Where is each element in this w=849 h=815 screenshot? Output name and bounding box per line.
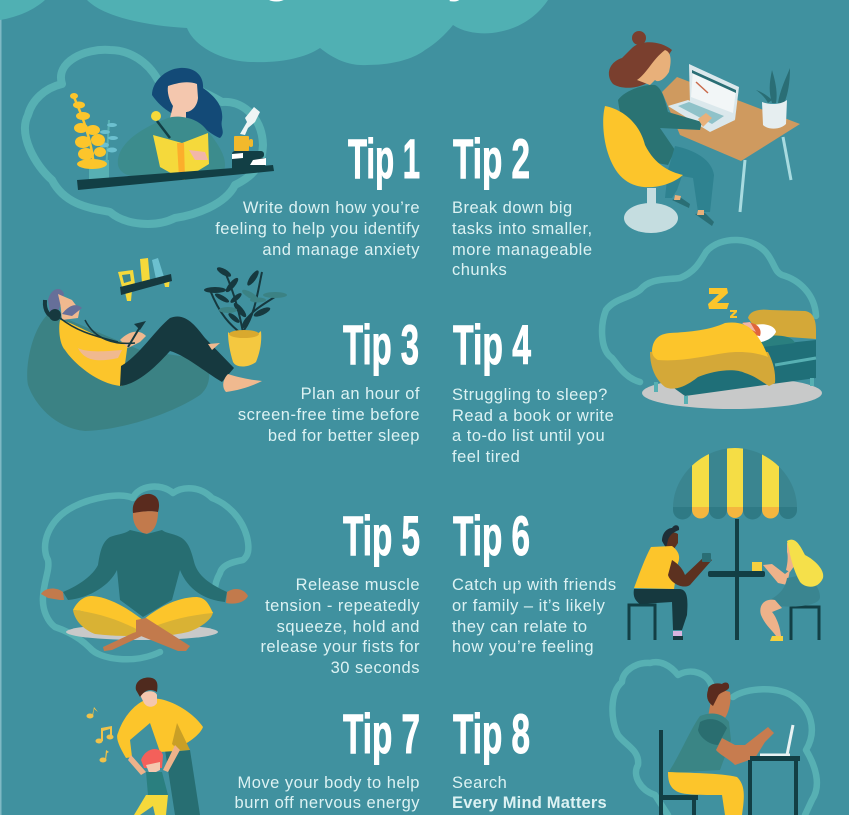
text: Tip 1 body: Write down how you’re (243, 199, 420, 217)
illustration: man relaxing on bean bag (27, 258, 287, 431)
text: Tip 6 body: they can relate to (452, 618, 588, 636)
text: Tip 6 body: how you’re feeling (452, 638, 594, 656)
illustration: father dancing with child (86, 678, 203, 815)
text: Tip 4 body: feel tired (452, 448, 520, 466)
heading: Tip 4: Tip 4 (453, 313, 531, 376)
heading: Tip 8: Tip 8 (453, 702, 530, 765)
illustration: friends under umbrella (629, 440, 823, 641)
text: Tip 1 body: and manage anxiety (262, 241, 420, 259)
text: Tip 7 body: burn off nervous energy (235, 794, 420, 812)
text: Tip 6 body: or family – it’s likely (452, 597, 606, 615)
text: Tip 5 body: tension - repeatedly (265, 597, 420, 615)
heading: Tip 3: Tip 3 (343, 313, 419, 376)
illustration: woman writing in journal (25, 50, 274, 224)
illustration: woman at laptop (603, 31, 800, 233)
illustration: man working at desk (612, 662, 817, 815)
text: Tip 3 body: Plan an hour of (301, 385, 420, 403)
text: Tip 4 body: Read a book or write (452, 407, 614, 425)
header cloud (0, 0, 548, 65)
text: Tip 7 body: Move your body to help (237, 774, 420, 792)
text: Tip 4 body: Struggling to sleep? (452, 386, 608, 404)
text: Tip 2 body: more manageable (452, 241, 592, 259)
heading: Tip 2: Tip 2 (453, 127, 530, 190)
heading: Tip 6: Tip 6 (453, 504, 530, 567)
text: Tip 8 body: Every Mind Matters (452, 794, 607, 812)
text: Tip 2 body: tasks into smaller, (452, 220, 593, 238)
text: Tip 4 body: a to-do list until you (452, 427, 605, 445)
heading: Tip 7: Tip 7 (343, 702, 420, 765)
text: Tip 3 body: bed for better sleep (268, 427, 420, 445)
illustration: meditating man (41, 487, 248, 659)
text: Tip 5 body: release your fists for (260, 638, 420, 656)
heading: Tip 5: Tip 5 (343, 504, 420, 567)
text: Tip 8 body: Search (452, 774, 507, 792)
text: Tip 2 body: Break down big (452, 199, 573, 217)
text: Tip 6 body: Catch up with friends (452, 576, 617, 594)
text: Tip 1 body: feeling to help you identify (215, 220, 420, 238)
text: Tip 5 body: squeeze, hold and (277, 618, 420, 636)
heading: Tip 1: Tip 1 (348, 127, 420, 190)
text: Tip 2 body: chunks (452, 261, 507, 279)
text: Tip 5 body: Release muscle (296, 576, 420, 594)
text: Tip 3 body: screen-free time before (238, 406, 420, 424)
illustration: person asleep in bed (602, 240, 822, 409)
text: Tip 5 body: 30 seconds (331, 659, 420, 677)
